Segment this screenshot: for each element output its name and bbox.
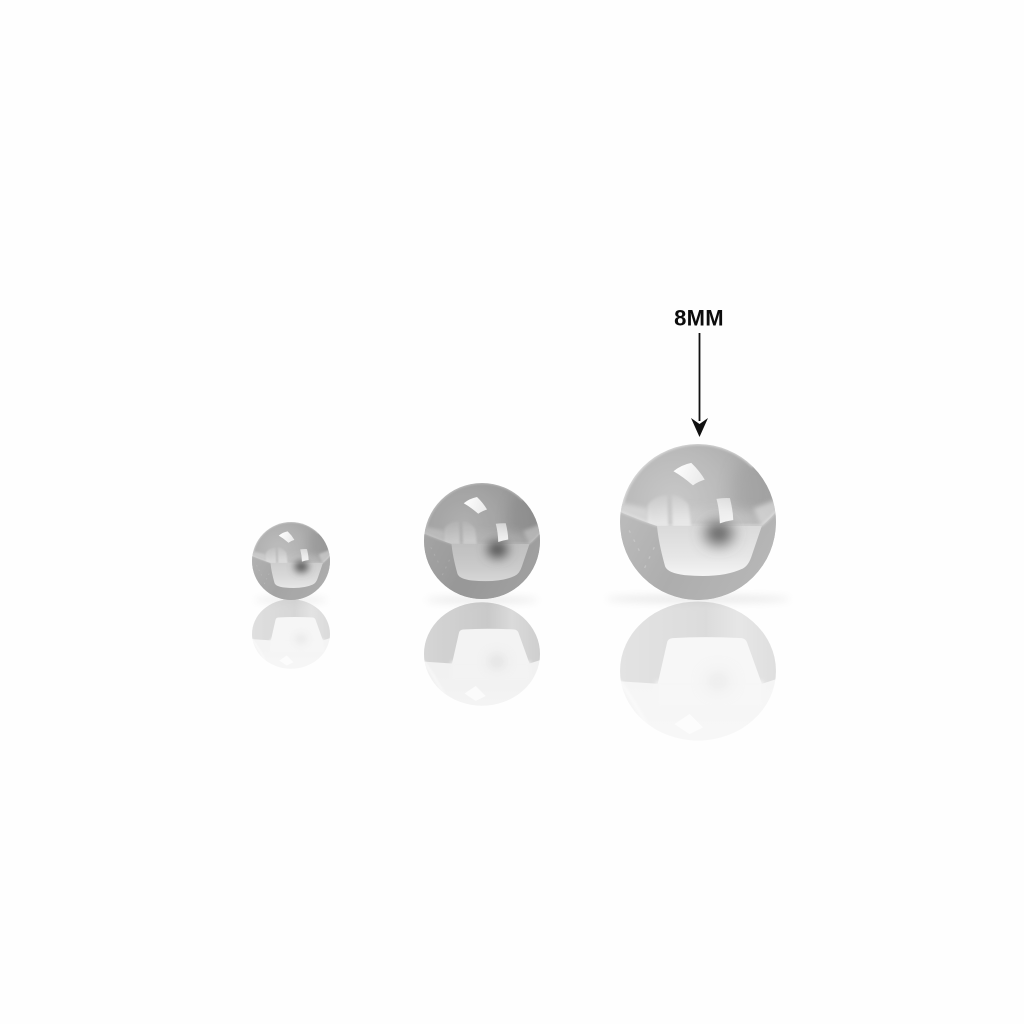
- glass ball: medium: [422, 483, 542, 601]
- size label: 8MM: [674, 306, 724, 330]
- product size scene: [252, 310, 776, 706]
- reflection: small ball: [251, 598, 331, 669]
- reflection: large ball: [617, 599, 779, 742]
- glass ball: large: [617, 444, 779, 603]
- floor shadows: [255, 596, 790, 603]
- reflection: medium ball: [422, 600, 542, 706]
- arrow: [691, 333, 708, 437]
- glass ball: small: [251, 522, 331, 601]
